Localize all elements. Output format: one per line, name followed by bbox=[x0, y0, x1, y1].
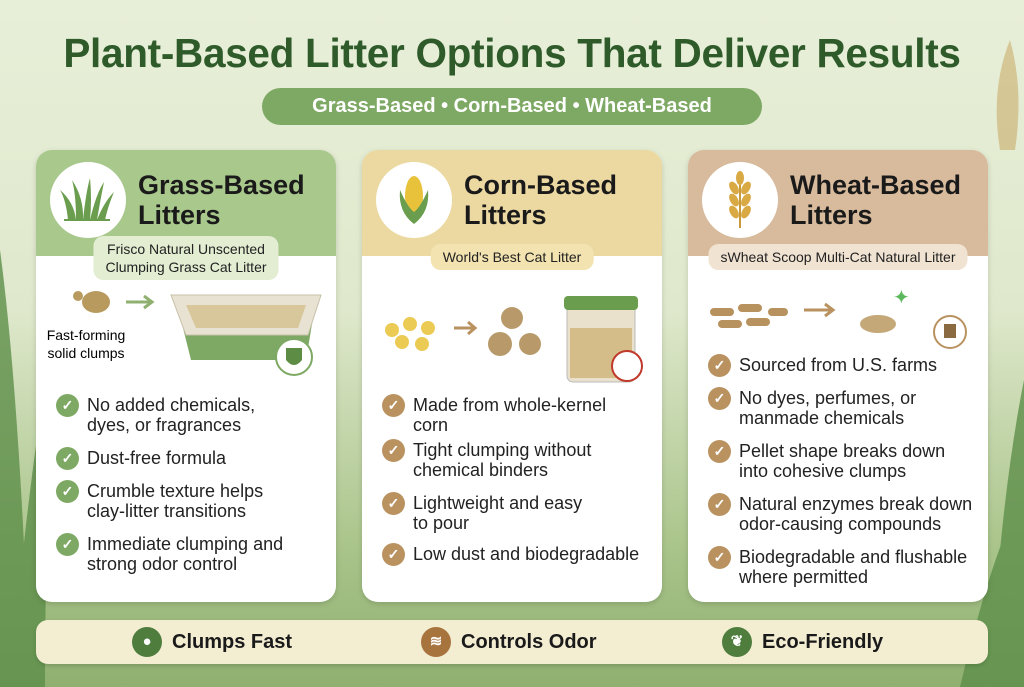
bullet list: where permitted bbox=[739, 567, 868, 587]
wheat header: Litters bbox=[790, 200, 873, 230]
corn header: Litters bbox=[464, 200, 547, 230]
corn header: Corn-Based bbox=[464, 170, 617, 200]
benefit: controls odor bbox=[421, 627, 597, 657]
bottom benefits bar bbox=[36, 620, 988, 664]
product pill: World's Best Cat Litter bbox=[443, 249, 581, 265]
benefit: controls odor: ≋ bbox=[430, 633, 442, 650]
benefit: eco-friendly bbox=[722, 627, 883, 657]
bullet list: Made from whole-kernel bbox=[413, 395, 606, 415]
bullet list: manmade chemicals bbox=[739, 408, 904, 428]
panel: wheat bbox=[688, 150, 988, 602]
benefit: eco-friendly: ❦ bbox=[731, 633, 743, 650]
illustration: pellets, clump, toilet bbox=[710, 287, 967, 349]
benefit: eco-friendly: Eco-Friendly bbox=[762, 630, 883, 652]
wheat header: Wheat-Based bbox=[790, 170, 961, 200]
grass header: Litters bbox=[138, 200, 221, 230]
bullet list bbox=[708, 354, 972, 587]
product pill bbox=[709, 244, 967, 270]
benefit: controls odor: Controls Odor bbox=[461, 630, 597, 652]
icon: corn bbox=[376, 162, 452, 238]
product pill: Frisco Natural Unscented bbox=[107, 241, 265, 257]
illustration: clumps and litter box: solid clumps bbox=[47, 345, 125, 361]
bullet list: Low dust and biodegradable bbox=[413, 544, 639, 564]
bullet list: odor-causing compounds bbox=[739, 514, 941, 534]
icon: grass bbox=[50, 162, 126, 238]
panel: grass bbox=[36, 150, 336, 602]
bullet list: Natural enzymes break down bbox=[739, 494, 972, 514]
product pill: sWheat Scoop Multi-Cat Natural Litter bbox=[721, 249, 955, 265]
bullet list: dyes, or fragrances bbox=[87, 415, 241, 435]
bullet list: Tight clumping without bbox=[413, 440, 591, 460]
grass header bbox=[36, 150, 336, 256]
title: Plant-Based Litter Options That Deliver Results bbox=[63, 30, 961, 76]
panel: corn bbox=[362, 150, 662, 602]
bullet list: strong odor control bbox=[87, 554, 237, 574]
product pill bbox=[431, 244, 593, 270]
bullet list: No dyes, perfumes, or bbox=[739, 388, 916, 408]
grass header: Grass-Based bbox=[138, 170, 305, 200]
bullet list: Biodegradable and flushable bbox=[739, 547, 967, 567]
subtitle pill bbox=[262, 88, 762, 125]
illustration: pellets, clump, toilet: ✦ bbox=[893, 287, 910, 309]
bullet list: Pellet shape breaks down bbox=[739, 441, 945, 461]
bullet list: chemical binders bbox=[413, 460, 548, 480]
illustration: kernels, clumps, container bbox=[385, 296, 643, 382]
bullet list bbox=[56, 394, 283, 574]
bullet list: into cohesive clumps bbox=[739, 461, 906, 481]
bullet list: Dust-free formula bbox=[87, 448, 226, 468]
product pill: Clumping Grass Cat Litter bbox=[105, 259, 267, 275]
benefit: clumps fast: Clumps Fast bbox=[172, 630, 292, 652]
bullet list: No added chemicals, bbox=[87, 395, 255, 415]
illustration: clumps and litter box bbox=[47, 291, 322, 376]
bullet list: Crumble texture helps bbox=[87, 481, 263, 501]
bullet list: Immediate clumping and bbox=[87, 534, 283, 554]
bullet list: Sourced from U.S. farms bbox=[739, 355, 937, 375]
wheat header bbox=[688, 150, 988, 256]
bullet list: clay-litter transitions bbox=[87, 501, 246, 521]
bullet list bbox=[382, 394, 639, 566]
bullet list: Lightweight and easy bbox=[413, 493, 582, 513]
bullet list: to pour bbox=[413, 513, 469, 533]
icon: wheat bbox=[702, 162, 778, 238]
corn header bbox=[362, 150, 662, 256]
product pill bbox=[93, 236, 279, 280]
subtitle pill: Grass-Based • Corn-Based • Wheat-Based bbox=[312, 95, 712, 117]
benefit: clumps fast bbox=[132, 627, 292, 657]
benefit: clumps fast: ● bbox=[142, 633, 152, 650]
bullet list: corn bbox=[413, 415, 448, 435]
illustration: clumps and litter box: Fast-forming bbox=[47, 327, 125, 343]
